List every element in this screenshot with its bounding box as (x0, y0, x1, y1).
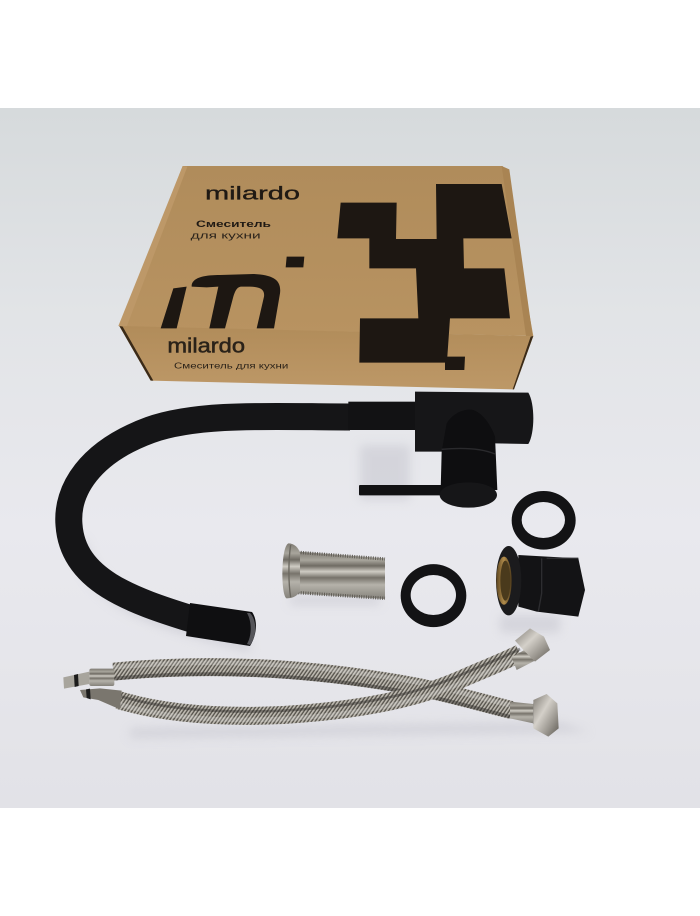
logo dot (286, 257, 304, 267)
flexible black spout (69, 416, 350, 646)
hose one fittings (89, 669, 114, 686)
hose two fittings (80, 688, 122, 709)
faucet body (348, 392, 533, 508)
braided hoses (63, 628, 559, 737)
box front face (119, 326, 533, 389)
black pixel pattern (337, 184, 512, 370)
box front brand logo: milardo (167, 336, 245, 358)
box front product name: Смеситель для кухни (174, 360, 289, 370)
photo background (0, 108, 700, 808)
threaded pipe (282, 543, 385, 599)
spout neck (348, 402, 417, 430)
spout nozzle (186, 603, 256, 646)
box top face (119, 166, 533, 336)
box side flaps (118, 166, 187, 327)
hose one nut (533, 694, 559, 737)
handle cartridge (441, 410, 497, 490)
large m logo (161, 274, 280, 328)
hose one (113, 663, 512, 717)
box lid subtitle: для кухни (191, 231, 261, 241)
box lid brand logo: milardo (205, 182, 300, 203)
rubber gasket small (512, 491, 576, 550)
soft shadows under objects (70, 445, 590, 738)
pipe flange (282, 543, 300, 598)
lever handle (359, 485, 442, 495)
hose two nut (515, 628, 550, 662)
box lid title: Смеситель (196, 219, 272, 229)
hose two (118, 649, 520, 720)
main horizontal cylinder (415, 392, 533, 452)
cardboard box (118, 166, 533, 389)
mounting nut with brass insert (496, 546, 585, 617)
rubber gasket large (401, 564, 466, 627)
